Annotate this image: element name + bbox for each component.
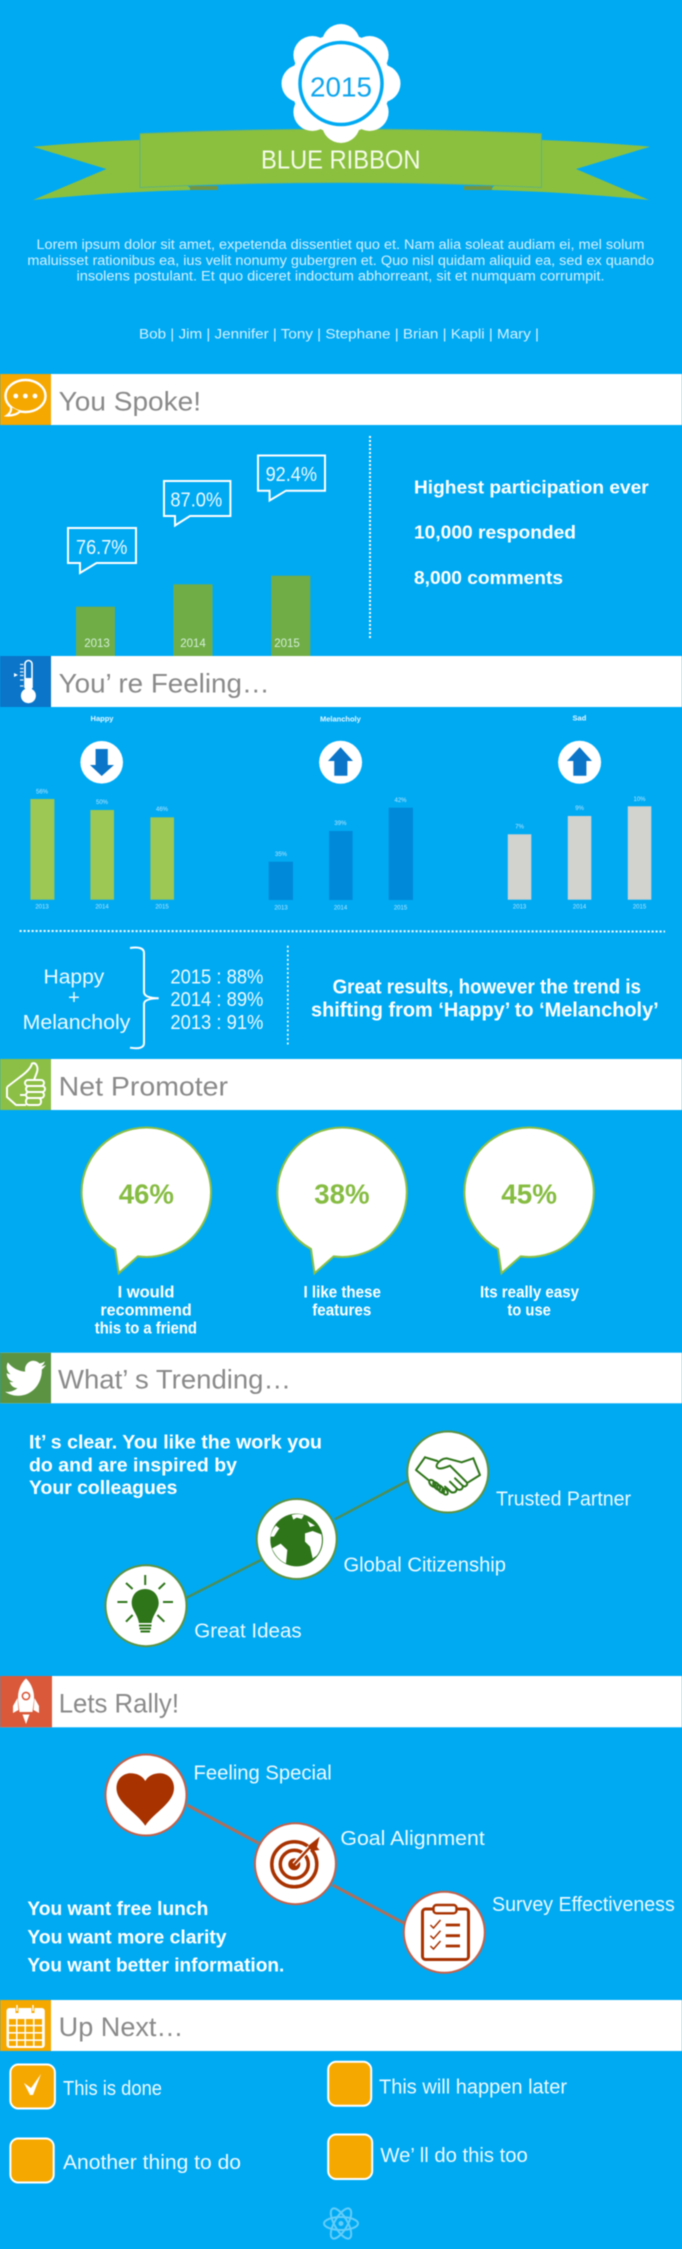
task: We'll do this too <box>328 2134 528 2179</box>
icon: rocket <box>13 1678 39 1724</box>
bar chart: 35% <box>275 852 288 858</box>
task: This is done: This is done <box>63 2078 162 2100</box>
section header: Up Next <box>0 2000 682 2051</box>
bar chart: 2013 <box>35 905 49 911</box>
participation stats: 8,000 comments <box>414 567 563 588</box>
heading: Lets Rally! <box>59 1688 179 1718</box>
icon: up arrow <box>558 741 601 784</box>
ribbon main band <box>140 129 542 188</box>
panel: Melancholy trend <box>269 715 413 912</box>
bar 2015 <box>271 576 310 656</box>
caption: I would <box>118 1284 174 1302</box>
task: This will happen later <box>328 2062 567 2106</box>
icon: target <box>272 1837 320 1887</box>
combined label: Melancholy <box>23 1012 130 1034</box>
callout 92.4%: 92.4% <box>266 464 317 486</box>
trending statement: do and are inspired by <box>29 1455 237 1476</box>
callout 76.7%: 76.7% <box>76 537 128 559</box>
bar chart <box>508 797 651 911</box>
intro paragraph: Lorem ipsum dolor sit amet, expetenda dissentiet quo et. Nam alia soleat audiam ei, mel solum <box>36 237 644 252</box>
bar chart: 9% <box>575 806 585 812</box>
heading: Up Next… <box>59 2012 184 2042</box>
heading: You Spoke! <box>59 387 201 417</box>
bar chart: 2014 <box>334 906 348 912</box>
icon: down arrow <box>80 741 123 784</box>
bar 2013: 2013 <box>84 638 110 650</box>
intro paragraph: maluisset rationibus ea, ius velit nonumy gubergren et. Quo nisl quidam aliquid ea, sed ex quando <box>27 253 654 268</box>
icon: atom logo <box>324 2206 358 2241</box>
bar chart: 56% <box>36 789 49 795</box>
icon: up arrow <box>319 741 362 784</box>
panel: Sad trend <box>508 714 651 911</box>
chart title: Happy <box>91 714 114 723</box>
item: Great Ideas <box>106 1565 302 1646</box>
heading: What’ s Trending… <box>58 1364 291 1394</box>
icon: speech bubble <box>6 380 46 416</box>
bar chart: 39% <box>334 821 347 827</box>
ribbon tails <box>33 140 650 200</box>
item: Survey Effectiveness <box>404 1892 675 1973</box>
bar 2014 <box>174 584 212 656</box>
bar chart: 2015 <box>633 905 647 911</box>
bar chart: 2014 <box>95 905 109 911</box>
stat bubble: 38%: 38% <box>314 1178 370 1209</box>
bar chart: 7% <box>515 824 525 830</box>
stat bubble: 38% <box>277 1128 407 1320</box>
chart title: Sad <box>573 714 587 723</box>
trending statement: Your colleagues <box>29 1478 177 1499</box>
callout 87.0% <box>164 481 230 526</box>
bar chart: 10% <box>633 797 646 803</box>
caption: features <box>312 1302 371 1320</box>
happy plus melancholy summary <box>23 948 264 1048</box>
callout 76.7% <box>68 528 136 573</box>
panel: participation bar chart <box>68 456 325 656</box>
rally statements: You want better information. <box>27 1956 284 1977</box>
section header: Lets Rally <box>0 1676 682 1727</box>
yearly figures: 2014 : 89% <box>170 989 264 1011</box>
names list: Bob | Jim | Jennifer | Tony | Stephane | Brian | Kapli | Mary | <box>139 326 539 341</box>
bar chart <box>30 789 174 911</box>
section header: You Spoke <box>0 374 682 425</box>
item: Feeling Special <box>106 1754 332 1836</box>
bar chart <box>269 798 413 912</box>
panel: Happy trend <box>30 714 174 911</box>
icon: globe <box>270 1514 323 1566</box>
item: Trusted Partner <box>407 1432 631 1512</box>
icon: light bulb <box>117 1575 173 1632</box>
task: This will happen later: This will happen later <box>379 2076 567 2098</box>
caption <box>304 1284 381 1320</box>
combined label: + <box>68 987 80 1009</box>
item: Global Citizenship <box>257 1499 506 1579</box>
task: Another thing to do: Another thing to do <box>63 2152 241 2174</box>
bar chart: 2015 <box>394 906 408 912</box>
flower badge <box>282 24 400 143</box>
icon: thumbs up <box>7 1063 45 1105</box>
bar chart: 2014 <box>573 905 587 911</box>
bar chart: 2013 <box>513 905 527 911</box>
icon: heart <box>116 1773 174 1826</box>
caption: recommend <box>100 1302 192 1320</box>
heading: You’ re Feeling… <box>59 669 270 699</box>
icon: handshake <box>416 1457 480 1496</box>
stat bubble: 46% <box>82 1128 211 1338</box>
ribbon banner with badge <box>33 24 650 200</box>
icon: thermometer <box>14 660 36 703</box>
icon: check mark <box>24 2074 41 2095</box>
intro paragraph: insolens postulant. Et quo diceret indoctum abhorreant, sit et numquam corrumpit. <box>76 268 604 283</box>
yearly figures <box>170 966 264 1034</box>
label: Feeling Special <box>194 1762 332 1784</box>
bar chart: 50% <box>96 800 109 806</box>
trend commentary <box>311 976 659 1022</box>
caption <box>480 1284 580 1320</box>
icon: clipboard <box>422 1905 468 1960</box>
caption: I like these <box>304 1284 381 1302</box>
combined label <box>23 966 130 1034</box>
participation stats <box>414 476 649 588</box>
trend commentary: Great results, however the trend is <box>333 976 641 998</box>
task: This is done <box>10 2064 162 2108</box>
caption: this to a friend <box>95 1320 197 1338</box>
section header: You're Feeling <box>0 656 682 707</box>
section header: Net Promoter <box>0 1059 682 1110</box>
item: Goal Alignment <box>255 1823 485 1904</box>
ribbon title: BLUE RIBBON <box>261 146 420 174</box>
bar chart: 46% <box>156 807 169 813</box>
caption <box>95 1284 197 1338</box>
label: Great Ideas <box>194 1621 302 1643</box>
yearly figures: 2013 : 91% <box>170 1012 264 1034</box>
task: We'll do this too: We’ ll do this too <box>380 2145 528 2167</box>
bar chart: 42% <box>394 798 407 804</box>
section header: What's Trending <box>0 1353 682 1403</box>
bar 2014: 2014 <box>180 638 206 650</box>
trending statement <box>29 1432 322 1499</box>
heading: Net Promoter <box>59 1072 228 1102</box>
chart title: Melancholy <box>320 715 362 724</box>
rally statements <box>27 1899 284 1977</box>
task: Another thing to do <box>10 2138 241 2182</box>
trend commentary: shifting from ‘Happy’ to ‘Melancholy’ <box>311 1000 659 1022</box>
callout 92.4% <box>258 456 325 500</box>
trending statement: It’ s clear. You like the work you <box>29 1432 322 1453</box>
callout 87.0%: 87.0% <box>170 490 222 512</box>
stat bubble: 45%: 45% <box>501 1178 557 1209</box>
icon: calendar <box>6 2005 45 2048</box>
intro paragraph <box>27 237 654 283</box>
label: Trusted Partner <box>496 1489 631 1511</box>
bracket <box>130 948 159 1048</box>
yearly figures: 2015 : 88% <box>170 966 264 988</box>
bar chart: 2015 <box>155 905 169 911</box>
rally statements: You want more clarity <box>27 1927 227 1948</box>
bar 2015: 2015 <box>274 638 300 650</box>
bar chart: 2013 <box>274 906 288 912</box>
caption: Its really easy <box>480 1284 580 1302</box>
badge year: 2015 <box>310 72 372 103</box>
caption: to use <box>507 1302 551 1320</box>
participation stats: Highest participation ever <box>414 476 649 497</box>
stat bubble: 46%: 46% <box>119 1178 174 1209</box>
label: Survey Effectiveness <box>492 1894 675 1916</box>
rally statements: You want free lunch <box>27 1899 208 1920</box>
label: Global Citizenship <box>344 1555 506 1577</box>
participation stats: 10,000 responded <box>414 522 576 543</box>
bar 2013 <box>76 607 115 656</box>
trending connector <box>186 1481 407 1598</box>
icon: twitter bird <box>5 1361 46 1396</box>
stat bubble: 45% <box>464 1128 594 1320</box>
rally connector <box>187 1805 404 1923</box>
label: Goal Alignment <box>340 1828 485 1850</box>
combined label: Happy <box>44 966 104 988</box>
